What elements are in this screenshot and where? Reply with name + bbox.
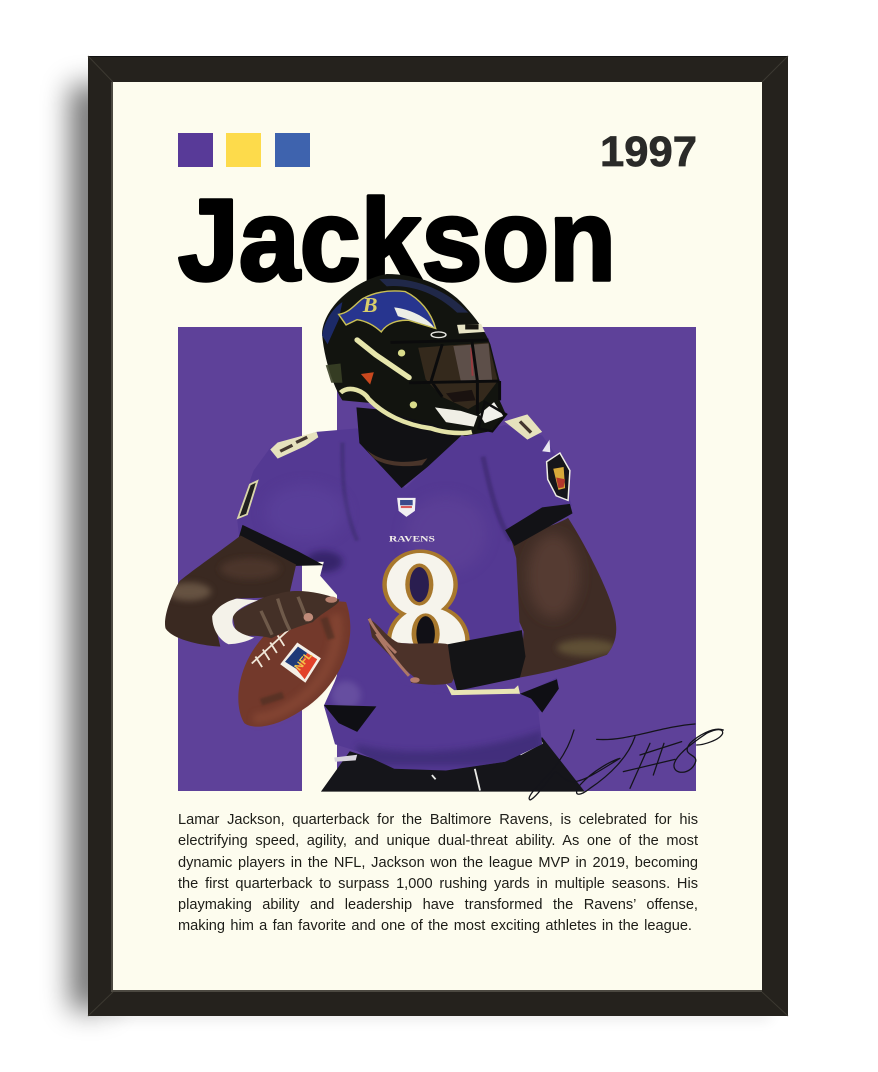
helmet sheen bbox=[379, 279, 468, 313]
NFL shield: NFL bbox=[292, 649, 315, 673]
left arm bbox=[165, 535, 296, 647]
year: 1997 bbox=[600, 128, 697, 176]
colour swatches bbox=[178, 133, 310, 167]
right hand bbox=[368, 618, 457, 685]
right arm bbox=[511, 518, 616, 678]
biography paragraph: dynamic players in the NFL, Jackson won the league MVP in 2019, becoming bbox=[178, 855, 698, 871]
helmet bbox=[322, 274, 506, 436]
jersey hem shadow pockets bbox=[324, 679, 559, 732]
laces bbox=[252, 614, 305, 667]
jersey patch below number bbox=[387, 642, 468, 695]
left hand and wristband bbox=[212, 591, 339, 644]
title: Jackson bbox=[178, 175, 616, 305]
biography paragraph: the first quarterback to surpass 1,000 rushing yards in multiple seasons. His bbox=[178, 876, 698, 892]
jersey bbox=[237, 425, 572, 771]
raven logo: B bbox=[362, 293, 378, 317]
poster paper bbox=[113, 82, 762, 990]
biography paragraph: playmaking ability and leadership have transformed the Ravens’ offense, bbox=[178, 897, 698, 913]
face bbox=[418, 342, 498, 409]
signature bbox=[529, 724, 723, 800]
right wristband bbox=[446, 630, 526, 695]
sleeve patch left bbox=[238, 481, 257, 518]
biography paragraph: electrifying speed, agility, and unique dual-threat ability. As one of the most bbox=[178, 833, 698, 849]
NFL collar shield bbox=[397, 498, 416, 517]
face mask bars bbox=[390, 340, 500, 414]
sleeve patch right bbox=[542, 440, 570, 500]
cream jaw trim bbox=[357, 340, 409, 378]
neck gaiter bbox=[356, 407, 462, 488]
shoulder number right bbox=[504, 414, 542, 440]
biography paragraph: making him a fan favorite and one of the most exciting athletes in the league. bbox=[178, 918, 692, 934]
player photo illustration bbox=[165, 274, 616, 792]
poster frame bbox=[88, 56, 788, 1016]
purple background panels bbox=[178, 327, 696, 791]
shoulder number left bbox=[270, 432, 318, 459]
biography paragraph: Lamar Jackson, quarterback for the Baltimore Ravens, is celebrated for his bbox=[178, 812, 698, 828]
jersey number 8 bbox=[382, 549, 470, 678]
football bbox=[238, 601, 350, 727]
biography paragraph bbox=[178, 812, 698, 934]
frame drop shadow bbox=[70, 85, 770, 1019]
raven logo bbox=[339, 291, 436, 332]
jersey wordmark: RAVENS bbox=[389, 534, 435, 543]
sleeve cuffs bbox=[239, 504, 572, 566]
pants bbox=[321, 737, 585, 792]
